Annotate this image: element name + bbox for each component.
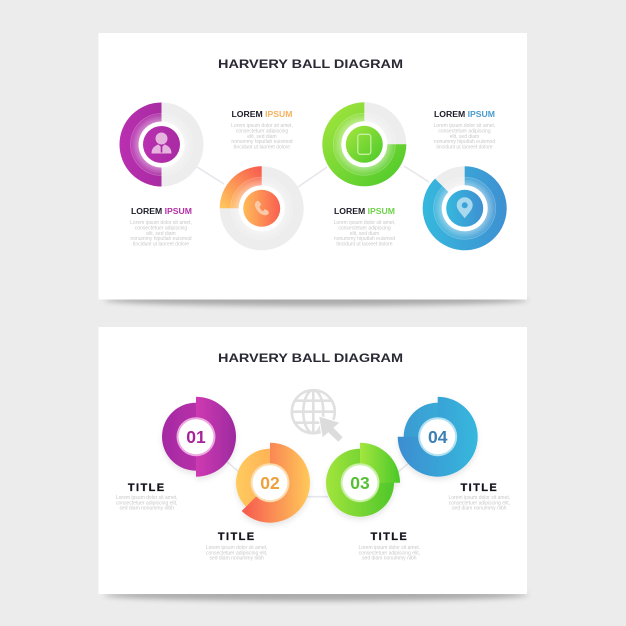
number 04: 04 [428,427,448,447]
panel: bottom card [98,327,528,601]
text block: title 02 [206,531,268,562]
harvey ball 2: quarter, orange [220,166,304,250]
text block: green lorem ipsum [334,207,395,248]
harvey ball 4: seven eighths, blue [423,166,507,250]
text block: blue lorem ipsum: elit, sed diam [450,134,479,140]
text block: title 03: sed diam nonummy nibh [362,556,417,562]
text block: blue lorem ipsum: nonummy hiputlah euismod [434,139,495,145]
text block: title 02: consectetuer adipiscing elit, [206,550,267,556]
text block: title 04: sed diam nonummy nibh [452,506,507,512]
text block: green lorem ipsum: Lorem ipsum dolor sit amet, [334,220,395,226]
text block: title 01: Lorem ipsum dolor sit amet, [116,495,178,501]
text block: title 01 [116,482,178,512]
text block: purple lorem ipsum: LOREM IPSUM [131,207,192,216]
text block: title 01: consectetuer adipiscing elit, [116,500,177,506]
icon: globe with cursor [292,390,343,442]
text block: title 03: TITLE [371,531,408,543]
text block: orange lorem ipsum: LOREM IPSUM [232,110,293,119]
text block: blue lorem ipsum: Lorem ipsum dolor sit amet, [434,123,495,129]
panel: top card [98,33,528,306]
icon: phone [255,200,269,216]
text block: green lorem ipsum: tincidunt ut laoreet dolore [336,242,393,248]
numbered ball 02 [236,443,310,523]
numbered ball 03 [326,443,400,517]
text block: purple lorem ipsum: nonummy hiputlah euismod [130,236,192,242]
text block: orange lorem ipsum: nonummy hiputlah euismod [231,139,293,145]
text block: title 02: Lorem ipsum dolor sit amet, [206,545,268,551]
number 02: 02 [260,473,280,493]
heading: top title: HARVERY BALL DIAGRAM [218,58,403,71]
connector lines: bottom diagram [226,461,410,497]
text block: green lorem ipsum: consectetuer adipiscing [338,225,391,231]
number 03: 03 [350,473,370,493]
text block: orange lorem ipsum [231,110,293,151]
text block: green lorem ipsum: nonummy hiputlah euismod [334,236,395,242]
text block: purple lorem ipsum: tincidunt ut laoreet dolore [133,242,189,248]
text block: orange lorem ipsum: consectetuer adipiscing [236,128,288,134]
text block: title 03: consectetuer adipiscing elit, [359,550,420,556]
text block: purple lorem ipsum: consectetuer adipiscing [135,225,187,231]
text block: title 01: TITLE [128,482,165,494]
text block: blue lorem ipsum: LOREM IPSUM [434,110,495,119]
text block: title 04: TITLE [461,482,498,494]
icon: businessman [152,132,172,154]
text block: blue lorem ipsum: consectetuer adipiscing [438,128,491,134]
text block: title 01: sed diam nonummy nibh [119,506,174,512]
heading: bottom title: HARVERY BALL DIAGRAM [218,352,403,365]
text block: blue lorem ipsum [434,110,495,151]
text block: purple lorem ipsum [130,207,192,248]
text block: green lorem ipsum: elit, sed diam [350,231,379,237]
text block: orange lorem ipsum: elit, sed diam [247,134,277,140]
harvey ball 1: half, purple [120,102,204,186]
icon: map pin [457,197,473,218]
connector lines: top diagram [197,166,429,187]
text block: blue lorem ipsum: tincidunt ut laoreet dolore [436,145,493,151]
text block: title 02: sed diam nonummy nibh [209,556,264,562]
harvey ball 3: three quarters, green [322,102,406,186]
text block: orange lorem ipsum: tincidunt ut laoreet dolore [234,145,290,151]
text block: title 04: Lorem ipsum dolor sit amet, [448,495,510,501]
text block: purple lorem ipsum: elit, sed diam [146,231,176,237]
text block: title 04: consectetuer adipiscing elit, [449,500,510,506]
text block: purple lorem ipsum: Lorem ipsum dolor sit amet, [130,220,192,226]
text block: title 04 [448,482,510,512]
numbered ball 04 [398,397,478,477]
text block: title 03: Lorem ipsum dolor sit amet, [358,545,420,551]
text block: orange lorem ipsum: Lorem ipsum dolor sit amet, [231,123,293,129]
text block: title 02: TITLE [218,531,255,543]
numbered ball 01 [162,397,236,477]
text block: green lorem ipsum: LOREM IPSUM [334,207,395,216]
number 01: 01 [186,427,206,447]
icon: mobile phone [358,134,371,154]
text block: title 03 [358,531,420,562]
